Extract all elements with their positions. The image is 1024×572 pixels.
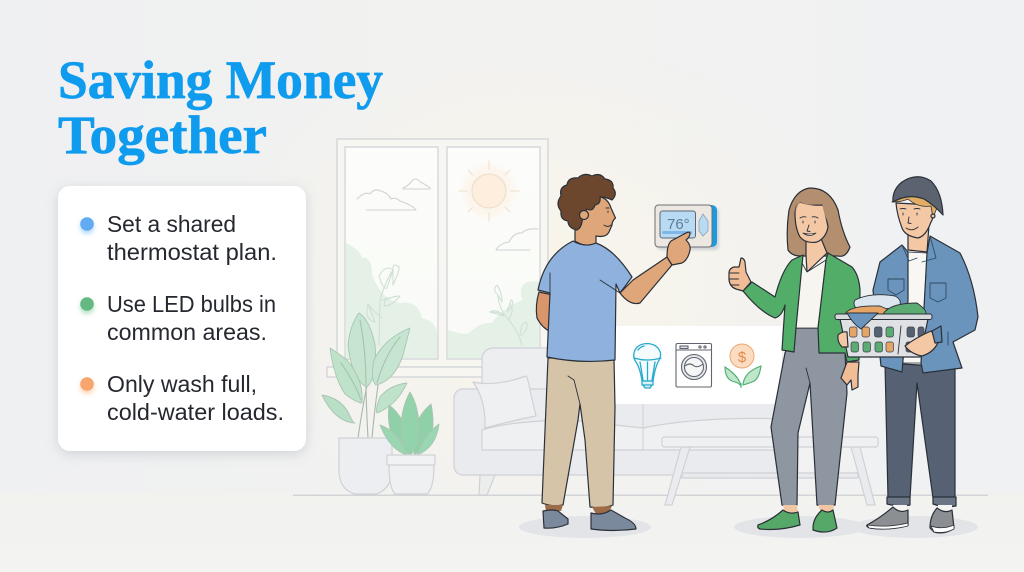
shoes xyxy=(543,510,568,528)
hair xyxy=(558,174,615,230)
hair back xyxy=(787,188,850,256)
sun xyxy=(459,161,519,221)
potted plants xyxy=(322,313,439,494)
laundry pile xyxy=(845,295,926,314)
hanging hand xyxy=(841,362,859,390)
trousers xyxy=(771,328,847,506)
icon: light bulb xyxy=(634,344,661,388)
basket xyxy=(835,313,932,357)
tip: LED bulbs xyxy=(80,291,276,345)
window sill xyxy=(327,367,557,377)
ear xyxy=(580,210,588,220)
sofa xyxy=(454,348,790,495)
window xyxy=(327,139,557,377)
hair front xyxy=(795,192,831,224)
icon: washing machine xyxy=(676,344,712,387)
thermostat xyxy=(655,205,719,250)
shadow xyxy=(734,516,866,538)
tip: laundry xyxy=(80,371,284,425)
blue cloth xyxy=(847,313,878,329)
icon: coin and leaves xyxy=(725,344,761,388)
coffee table xyxy=(662,437,878,505)
back arm xyxy=(536,292,553,332)
raised arm xyxy=(620,257,672,304)
thermostat: 76° xyxy=(667,216,690,233)
hand xyxy=(667,232,690,265)
trousers xyxy=(885,363,955,498)
neck and face xyxy=(575,196,616,245)
tip: laundry: cold-water loads. xyxy=(107,399,284,425)
clouds xyxy=(357,179,538,250)
shadow xyxy=(852,516,978,538)
tall plant xyxy=(322,313,410,494)
foliage outside window xyxy=(346,243,539,358)
tip: thermostat xyxy=(80,211,277,265)
white top xyxy=(796,260,826,328)
icon: coin and leaves: $ xyxy=(738,349,747,366)
person: woman with thumbs up xyxy=(729,188,866,538)
person: man with laundry basket xyxy=(835,177,978,538)
tip: LED bulbs: Use LED bulbs in xyxy=(107,291,276,317)
person: man with thermostat xyxy=(519,174,690,538)
white shirt xyxy=(903,252,927,363)
sneakers xyxy=(867,507,908,529)
tip: thermostat: thermostat plan. xyxy=(107,239,277,265)
tip: thermostat: Set a shared xyxy=(107,211,236,237)
neck and face xyxy=(908,225,929,252)
neck and face xyxy=(806,236,827,272)
title xyxy=(58,50,383,165)
socks xyxy=(893,505,952,513)
thumb up hand xyxy=(729,258,751,291)
icon panel xyxy=(614,326,782,404)
floor line xyxy=(293,494,988,496)
cardigan xyxy=(743,255,803,352)
face details xyxy=(900,208,920,230)
shoes xyxy=(758,510,800,530)
small plant xyxy=(380,392,439,494)
hair xyxy=(892,192,938,218)
small pot xyxy=(389,465,434,494)
title: Together xyxy=(58,105,267,165)
basket holes xyxy=(850,327,924,352)
tip: LED bulbs: common areas. xyxy=(107,319,267,345)
shirt xyxy=(538,241,632,361)
shadow xyxy=(519,516,651,538)
face details xyxy=(800,217,818,232)
cuffs xyxy=(887,497,956,507)
title: Saving Money xyxy=(58,50,383,110)
tall pot xyxy=(339,438,392,494)
ankles xyxy=(545,505,612,514)
ankles xyxy=(783,505,834,513)
face details xyxy=(604,208,611,226)
beanie xyxy=(893,177,943,215)
trousers xyxy=(542,358,615,508)
carrying hands xyxy=(838,326,942,356)
panel: tips card xyxy=(58,186,306,451)
jacket xyxy=(873,245,908,372)
tip: laundry: Only wash full, xyxy=(107,371,257,397)
